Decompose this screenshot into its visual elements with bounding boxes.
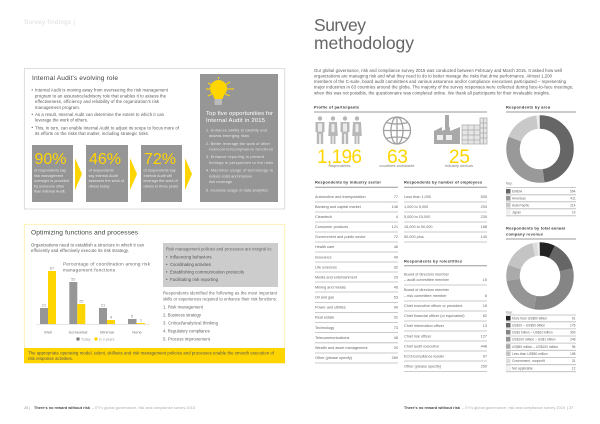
legend: area: Americas: [512, 196, 526, 200]
running header: survey findings: Survey findings |: [24, 19, 75, 26]
bullet text: evolving role: its efforts on the risks that matter, including strategic risks.: [35, 131, 149, 136]
table: respondents by roles/titles: ECO/compliance leader: [404, 354, 445, 358]
stat: respondents: 1,196: [317, 147, 362, 168]
title: survey methodology: [314, 15, 414, 53]
legend: area: Key:: [506, 182, 513, 186]
footer left: – EY's global governance, risk and compliance survey 2015: [92, 406, 195, 410]
table: respondents by industry sector: 31: [394, 316, 398, 320]
stat card: 72%: Internal Audit will: [144, 174, 172, 178]
stat card: 90%: risk management: [34, 174, 64, 178]
bar chart: coordination among risk management functions: 52: [71, 276, 76, 282]
table: respondents by industry sector: 49: [394, 255, 398, 259]
legend: revenue: More than US$50 billion: [512, 316, 547, 320]
table: respondents by industry sector: 90: [394, 306, 398, 310]
icon: people: [316, 116, 362, 144]
bar chart: coordination among risk management functions: 25: [79, 298, 84, 304]
callout: risk management policies: Influencing behaviors: [170, 254, 212, 260]
legend: revenue: Less than US$50 million: [512, 352, 548, 356]
table: respondents by number of employees: 188: [481, 225, 487, 229]
table: respondents by industry sector: 48: [394, 336, 398, 340]
footer right: – EY's global governance, risk and compliance survey 2015: [462, 406, 565, 410]
table: respondents by roles/titles: Chief audit executive: [404, 344, 439, 348]
table: respondents by industry sector: 73: [394, 326, 398, 330]
table: respondents by roles/titles: Chief executive officer or president: [404, 304, 463, 308]
legend: area: [506, 182, 576, 216]
table: respondents by industry sector: Banking and capital market: [315, 205, 362, 209]
table: respondents by roles/titles: 448: [481, 344, 487, 348]
legend: revenue: 176: [570, 323, 576, 327]
table: respondents by number of employees: 230: [481, 215, 487, 219]
title: survey methodology: methodology: [314, 33, 414, 53]
legend: area: EMEIA: [512, 189, 523, 193]
footer right: | 27: [567, 406, 573, 410]
table: respondents by industry sector: Wealth and asset management: [315, 346, 368, 350]
table: respondents by industry sector: Government and public sector: [315, 235, 366, 239]
footer left: [24, 406, 195, 410]
table: respondents by industry sector: Technology: [315, 326, 334, 330]
bullet text: evolving role: •: [32, 125, 34, 130]
stat card: 46%: 46%: [89, 151, 121, 168]
section: respondents by area: Respondents by area: [506, 104, 551, 110]
list: top five opportunities: assess emerging risks: [209, 134, 249, 138]
heading: top five opportunities: Internal Audit in 2015: [206, 118, 266, 124]
title: survey methodology: Survey: [314, 15, 366, 35]
legend: revenue: 198: [570, 352, 576, 356]
table: respondents by industry sector: 4: [396, 215, 398, 219]
intro text: methodology: [314, 68, 573, 95]
legend: area: 411: [570, 196, 576, 200]
table: respondents by industry sector: Respondents by industry sector: [315, 180, 381, 184]
intro text: methodology: major industries in 63 countries around the globe. The majority of the survey responses were collected during face-to-face meetings;: [314, 84, 573, 90]
table: respondents by roles/titles: Board of directors member: [404, 288, 450, 292]
table: respondents by industry sector: [315, 180, 398, 363]
conclusion band: risk response activities.: [28, 356, 73, 361]
intro text: optimizing functions: Organizations need to establish a structure in which it can: [31, 242, 145, 247]
bar chart: coordination among risk management functions: 5: [131, 314, 134, 318]
chart title: [63, 262, 151, 272]
legend: revenue: US$50 million – US$100 million: [512, 345, 558, 349]
table: respondents by industry sector: Cleantech: [315, 215, 332, 219]
table: respondents by roles/titles: Other (please specify): [404, 364, 442, 368]
list: top five opportunities: findings in perspective to the risks: [209, 161, 273, 165]
bar chart: coordination among risk management functions: 1: [140, 318, 143, 322]
legend: area: 214: [570, 203, 576, 207]
table: respondents by industry sector: Oil and gas: [315, 296, 334, 300]
legend: revenue: Government, nonprofit: [512, 359, 545, 363]
table: respondents by industry sector: 46: [394, 285, 398, 289]
stat: countries: countries worldwide: [379, 163, 415, 168]
list: top five opportunities: risk/control/compliance functions: [209, 147, 273, 151]
callout: risk management policies: •: [166, 254, 168, 260]
icon: factory and office building: [434, 115, 487, 144]
list: top five opportunities: 5. Increase usage of data analytics: [206, 188, 268, 192]
legend: revenue: US$100 million – US$1 billion: [512, 338, 556, 342]
heading: top five opportunities: [206, 111, 273, 124]
intro text: methodology: when this was not possible, the questionnaire was completed online. We thank all participants for their invaluable insights.: [314, 90, 550, 95]
text block: skills and experiences: 3. Critical/analytical thinking: [163, 320, 219, 326]
bullet text: evolving role: •: [32, 112, 34, 117]
list: top five opportunities: reduce costs and improve: [209, 174, 252, 178]
section: respondents by total annual company revenue: company revenue: [506, 232, 544, 236]
bar chart: coordination among risk management functions: None: [132, 330, 143, 334]
bullet text: evolving role: As a result, Internal Audit can determine the extent to which it can: [35, 112, 165, 117]
intro text: methodology: organizations are managing risk and what they need to do to better manage the risks that drive performance. Almost 1,200: [314, 74, 553, 78]
table: respondents by industry sector: 46: [394, 245, 398, 249]
stat card: 90%: of respondents say: [34, 168, 66, 172]
legend: area: Asia-Pacific: [512, 203, 530, 207]
legend: area: 19: [572, 210, 576, 214]
stat card: 72%: leverage the work of: [144, 179, 179, 183]
section: respondents by total annual company revenue: [506, 226, 576, 372]
bar chart: coordination among risk management functions: [36, 262, 151, 342]
table: respondents by industry sector: Power and utilities: [315, 306, 346, 310]
bar chart: coordination among risk management functions: 4: [110, 314, 113, 320]
callout: risk management policies: Risk management policies and processes are integral to:: [166, 246, 272, 252]
bullet text: evolving role: Internal Audit is moving away from overseeing the risk management: [35, 88, 169, 92]
stat card: 90%: by someone other: [34, 184, 65, 188]
table: respondents by roles/titles: Respondents by roles/titles: [404, 258, 462, 264]
table: respondents by number of employees: 140: [481, 235, 487, 239]
bar chart: coordination among risk management functions: Minimal: [100, 330, 114, 334]
icon: light bulb: [206, 77, 234, 105]
intro text: methodology: members of the C-suite, board audit committees and various assurance and/or compliance executives participated – representing: [314, 79, 567, 84]
bullet text: evolving role: This, in turn, can enable Internal Audit to adjust its scope to focus more of: [35, 125, 180, 130]
legend: revenue: 91: [572, 316, 576, 320]
table: respondents by industry sector: 269: [392, 356, 398, 360]
legend: revenue: Not applicable: [512, 366, 533, 370]
stat card: 46%: assesses the work of: [88, 179, 125, 183]
table: respondents by roles/titles: 62: [483, 314, 487, 318]
stat card: 46%: [86, 145, 128, 202]
bullet text: evolving role: program to an assurance/advisory role that enables it to assess the: [35, 93, 167, 98]
text block: skills and experiences: Respondents identified the following as the most important: [163, 290, 278, 296]
table: respondents by number of employees: 5,000 to 15,000: [404, 215, 430, 219]
callout: risk management policies: Establishing communication protocols: [170, 270, 244, 274]
table: respondents by industry sector: Mining and metals: [315, 285, 346, 289]
stat card: 46%: say Internal Audit: [88, 174, 119, 178]
intro text: methodology: Our global governance, risk and compliance survey 2015 was conducted between February and March 2015. It asked how well: [314, 68, 562, 73]
table: respondents by roles/titles: 250: [481, 364, 487, 368]
table: respondents by roles/titles: Chief financial officer (or equivalent): [404, 314, 465, 318]
conclusion band: The appropriate operating model, talent, skillsets and risk management policies and processes enable the smooth execution of: [28, 350, 275, 356]
table: respondents by industry sector: Insurance: [315, 255, 332, 259]
table: respondents by roles/titles: – risk committee member: [404, 294, 447, 298]
stat: sectors: industry sectors: [445, 163, 473, 168]
stat card: 72%: [141, 145, 182, 202]
donut chart: respondents by area: [513, 122, 567, 176]
arrow: [185, 158, 192, 190]
legend: revenue: [506, 310, 576, 372]
table: respondents by roles/titles: 13: [483, 324, 487, 328]
table: respondents by industry sector: Health care: [315, 245, 334, 249]
section: respondents by area: [506, 104, 576, 216]
bullet text: evolving role: [32, 88, 180, 136]
stat card: 90%: than Internal Audit.: [34, 190, 66, 194]
legend: In 2 years: [99, 338, 115, 342]
table: respondents by roles/titles: 97: [483, 354, 487, 358]
table: respondents by number of employees: 293: [481, 205, 487, 209]
stat card: 90%: oversight is provided: [34, 179, 69, 183]
bar chart: coordination among risk management functions: 21: [42, 302, 47, 308]
text block: skills and experiences: 5. Process improvement: [163, 336, 211, 342]
table: respondents by roles/titles: 15: [483, 278, 487, 282]
chart title: management functions: [63, 268, 116, 272]
legend: area: Japan: [512, 210, 521, 214]
bullet text: evolving role: management program.: [35, 105, 80, 110]
table: respondents by roles/titles: Chief information officer: [404, 324, 445, 328]
legend: revenue: 96: [572, 345, 576, 349]
table: respondents by industry sector: 72: [394, 235, 398, 239]
heading: top five opportunities: Top five opportunities for: [206, 111, 273, 117]
table: respondents by industry sector: 121: [392, 225, 398, 229]
table: respondents by number of employees: 505: [481, 195, 487, 199]
stat card: 72%: 72%: [144, 151, 176, 168]
list: top five opportunities: 2. Better leverage the work of other: [206, 142, 271, 146]
bullet text: evolving role: leverage the work of others.: [35, 118, 88, 123]
heading: optimizing functions: Optimizing functions and processes: [31, 230, 139, 236]
list: top five opportunities: 1. Enhance ability to identify and: [206, 128, 267, 132]
legend: revenue: Key:: [506, 310, 513, 314]
intro text: optimizing functions: [31, 242, 145, 253]
stat: sectors: 25: [449, 147, 470, 168]
stat: countries: [379, 147, 415, 168]
stat card: 46%: of respondents: [88, 168, 114, 172]
table: respondents by number of employees: 1,000 to 5,000: [404, 205, 428, 209]
legend: revenue: 393: [570, 330, 576, 334]
icon: globe: [384, 117, 410, 144]
list: top five opportunities: risk coverage: [209, 180, 232, 184]
legend: revenue: 31: [572, 359, 576, 363]
footer left: There's no reward without risk: [34, 406, 91, 410]
table: respondents by roles/titles: – audit committee member: [404, 278, 450, 282]
table: respondents by industry sector: Real estate: [315, 316, 334, 320]
legend: revenue: US$1 billion – US$10 billion: [512, 330, 553, 334]
table: respondents by industry sector: Consumer products: [315, 225, 348, 229]
text block: skills and experiences: 2. Business strategy: [163, 312, 202, 318]
table: respondents by number of employees: [404, 180, 487, 242]
table: respondents by number of employees: Less than 1,000: [404, 195, 431, 199]
section: respondents by total annual company revenue: Respondents by total annual: [506, 226, 565, 230]
stat card: 90%: 90%: [34, 151, 66, 168]
table: respondents by industry sector: Other (please specify): [315, 356, 353, 360]
table: respondents by roles/titles: 6: [485, 294, 487, 298]
legend: revenue: 248: [570, 338, 576, 342]
stat card: 90%: [32, 145, 73, 202]
bar chart: coordination among risk management functions: Somewhat: [69, 330, 88, 334]
heading: evolving role: Internal Audit's evolving role: [32, 75, 118, 82]
table: respondents by industry sector: Automotive and transportation: [315, 195, 366, 199]
table: respondents by industry sector: 32: [394, 265, 398, 269]
footer right: [404, 406, 573, 410]
callout: risk management policies: •: [166, 262, 168, 267]
bar chart: coordination among risk management functions: 21: [101, 302, 106, 308]
table: respondents by roles/titles: Board of directors member: [404, 272, 450, 276]
bar chart: coordination among risk management functions: Well: [44, 330, 52, 334]
bullet text: evolving role: •: [32, 88, 34, 92]
arrow: [130, 158, 137, 190]
sidebar: top five opportunities: [200, 74, 278, 202]
list: top five opportunities: 4. Maximize usage of technology to: [206, 168, 273, 172]
section: profile of participants: Profile of participants: [314, 104, 359, 110]
stat card: 72%: others in three years.: [144, 184, 179, 188]
table: respondents by number of employees: 15,000 to 50,000: [404, 225, 433, 229]
callout: risk management policies: •: [166, 277, 168, 282]
bar chart: coordination among risk management functions: 67: [50, 266, 55, 270]
footer left: 26 |: [24, 406, 30, 410]
callout: risk management policies: •: [166, 270, 168, 274]
table: respondents by number of employees: Respondents by number of employees: [404, 180, 482, 184]
callout: risk management policies: Facilitating risk reporting: [170, 277, 219, 282]
table: respondents by roles/titles: [404, 258, 487, 372]
donut chart: revenue: [513, 249, 567, 303]
list: top five opportunities: [206, 128, 273, 192]
legend: area: 594: [570, 189, 576, 193]
legend: revenue: US$10 – US$50 billion: [512, 323, 545, 327]
table: respondents by industry sector: Media and entertainment: [315, 275, 358, 279]
legend: revenue: 12: [572, 366, 576, 370]
conclusion band: [24, 348, 285, 363]
chart title: Percentage of coordination among risk: [63, 262, 151, 266]
text block: skills and experiences: 4. Regulatory compliance: [163, 328, 211, 334]
text block: skills and experiences: skills or experiences required to enhance their risk functions:: [163, 296, 277, 302]
legend: [76, 337, 115, 342]
table: respondents by industry sector: 146: [392, 205, 398, 209]
table: respondents by industry sector: Telecommunications: [315, 336, 349, 340]
arrow: [75, 158, 82, 190]
text block: skills and experiences: 1. Risk management: [163, 304, 204, 310]
stat: countries: 63: [387, 147, 408, 168]
table: respondents by industry sector: 20: [394, 346, 398, 350]
callout: risk management policies: Coordinating activities: [170, 262, 211, 267]
table: respondents by industry sector: 29: [394, 275, 398, 279]
list: top five opportunities: 3. Enhance reporting to present: [206, 155, 265, 159]
intro text: optimizing functions: efficiently and effectively execute its risk strategy.: [31, 248, 129, 253]
table: respondents by number of employees: 50,000 plus: [404, 235, 424, 239]
text block: skills and experiences: [163, 290, 278, 342]
section: profile of participants: [314, 104, 487, 168]
stat: respondents: respondents: [328, 163, 351, 168]
table: respondents by roles/titles: Chief risk officer: [404, 334, 432, 338]
table: respondents by industry sector: 77: [394, 195, 398, 199]
table: respondents by roles/titles: 18: [483, 304, 487, 308]
footer right: There's no reward without risk: [404, 406, 461, 410]
table: respondents by roles/titles: 127: [481, 334, 487, 338]
stat card: 46%: others today.: [88, 184, 110, 188]
bullet text: evolving role: effectiveness, efficiency and reliability of the organization's risk: [35, 99, 160, 104]
callout: risk management policies: [163, 243, 278, 287]
table: respondents by industry sector: Life sciences: [315, 265, 337, 269]
stat card: 72%: of respondents say: [144, 168, 176, 172]
legend: Today: [81, 338, 91, 342]
panel: optimizing functions and processes: [24, 224, 285, 363]
table: respondents by industry sector: 53: [394, 296, 398, 300]
panel: internal audit's evolving role: [24, 68, 285, 209]
